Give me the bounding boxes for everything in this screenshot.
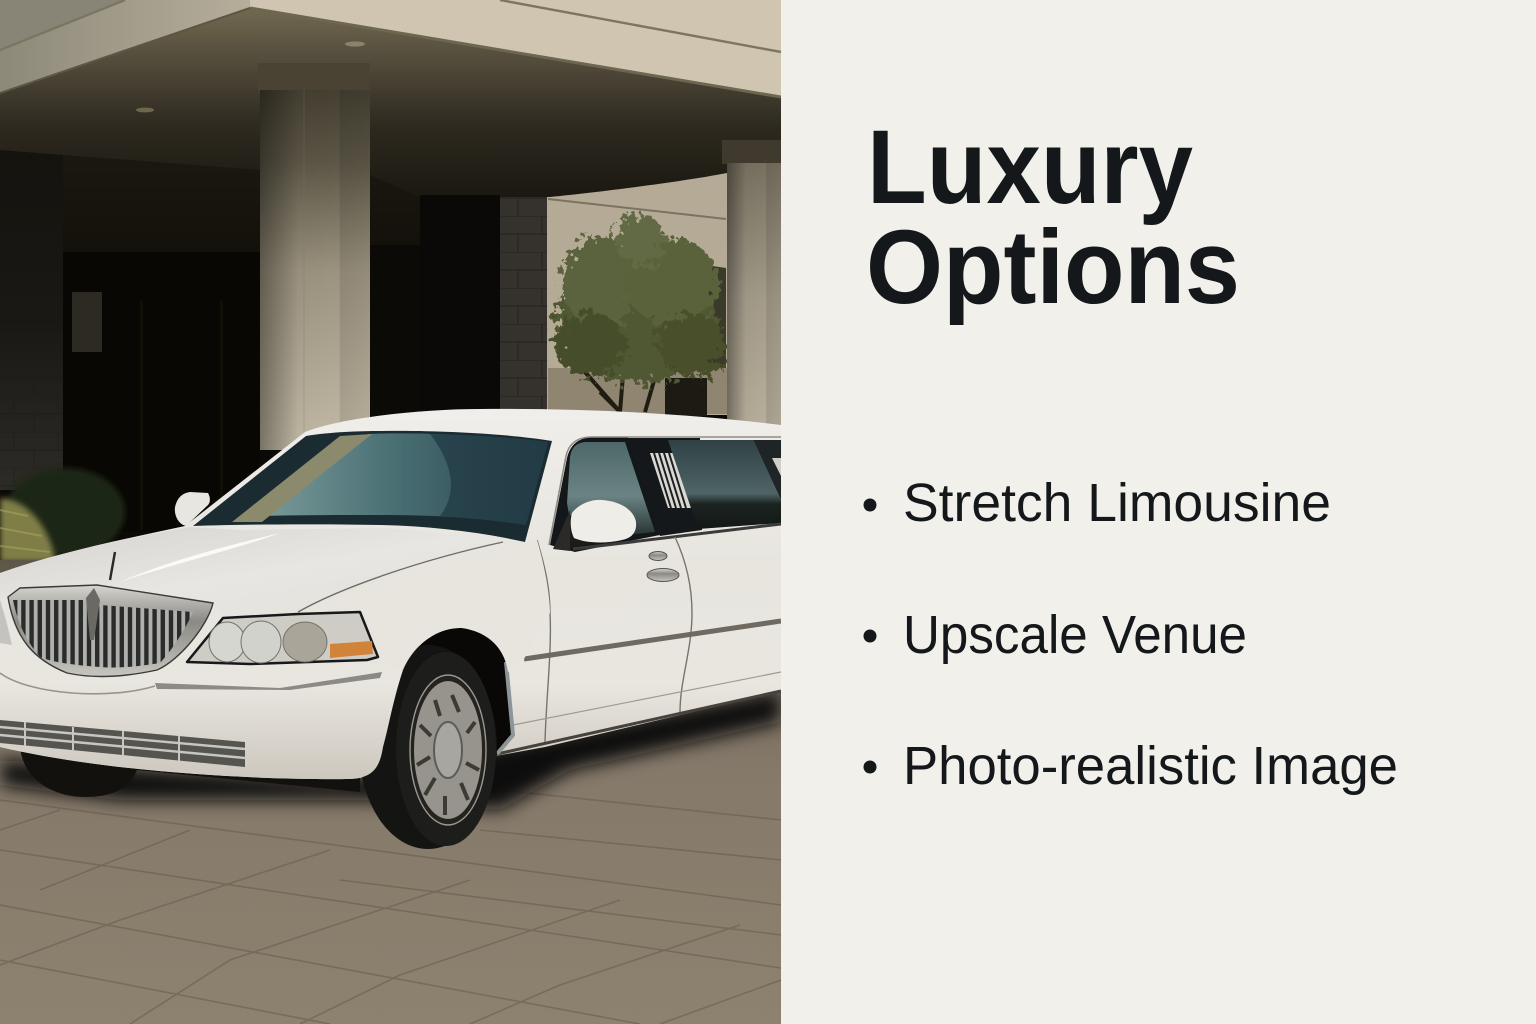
title <box>866 109 1240 326</box>
hood highlight <box>120 533 280 582</box>
hood <box>0 527 367 584</box>
photo: limousine outside upscale venue <box>0 0 781 1024</box>
front wheel arch <box>420 628 511 755</box>
arch trim <box>497 662 513 754</box>
stone pillar <box>420 195 547 420</box>
left headlight edge <box>0 600 12 645</box>
title: Options <box>866 209 1240 326</box>
grille <box>8 585 213 676</box>
right column <box>722 140 781 433</box>
window pillar with vents <box>627 438 702 536</box>
front tire far side <box>20 752 360 797</box>
side mirror <box>570 500 636 548</box>
item: Stretch Limousine: Stretch Limousine <box>903 473 1331 533</box>
car body <box>0 409 781 779</box>
pavement <box>0 560 781 1024</box>
bullet list <box>864 473 1398 796</box>
car shadow <box>0 690 781 810</box>
panel: text background <box>781 0 1536 1024</box>
item: Photo-realistic Image: Photo-realistic Image <box>903 736 1398 796</box>
item: Upscale Venue: Upscale Venue <box>903 605 1247 665</box>
bumper curve <box>0 673 155 694</box>
fender upper fill <box>390 540 550 672</box>
beltline <box>573 524 781 549</box>
door seams and trim <box>497 537 781 754</box>
building: dark entrance wall <box>0 150 727 560</box>
tree <box>554 214 726 412</box>
fender crease <box>298 542 503 612</box>
front wheel <box>359 645 497 849</box>
limousine <box>0 409 781 849</box>
building: soffit <box>0 8 781 197</box>
building: upper fascia <box>0 0 781 112</box>
headlight <box>187 612 378 664</box>
shrubs <box>0 468 125 562</box>
front bumper and fender <box>0 666 403 780</box>
chrome bumper strip <box>155 672 382 690</box>
title: Luxury <box>867 109 1193 226</box>
left mirror <box>175 492 210 526</box>
door handles <box>647 552 679 582</box>
hood ornament <box>110 552 115 580</box>
windshield <box>193 431 552 542</box>
front side window <box>549 437 781 552</box>
rear windows <box>668 440 781 529</box>
concrete column <box>258 63 370 450</box>
lower air vent <box>0 720 245 767</box>
building: rear wall beyond canopy <box>547 170 727 416</box>
